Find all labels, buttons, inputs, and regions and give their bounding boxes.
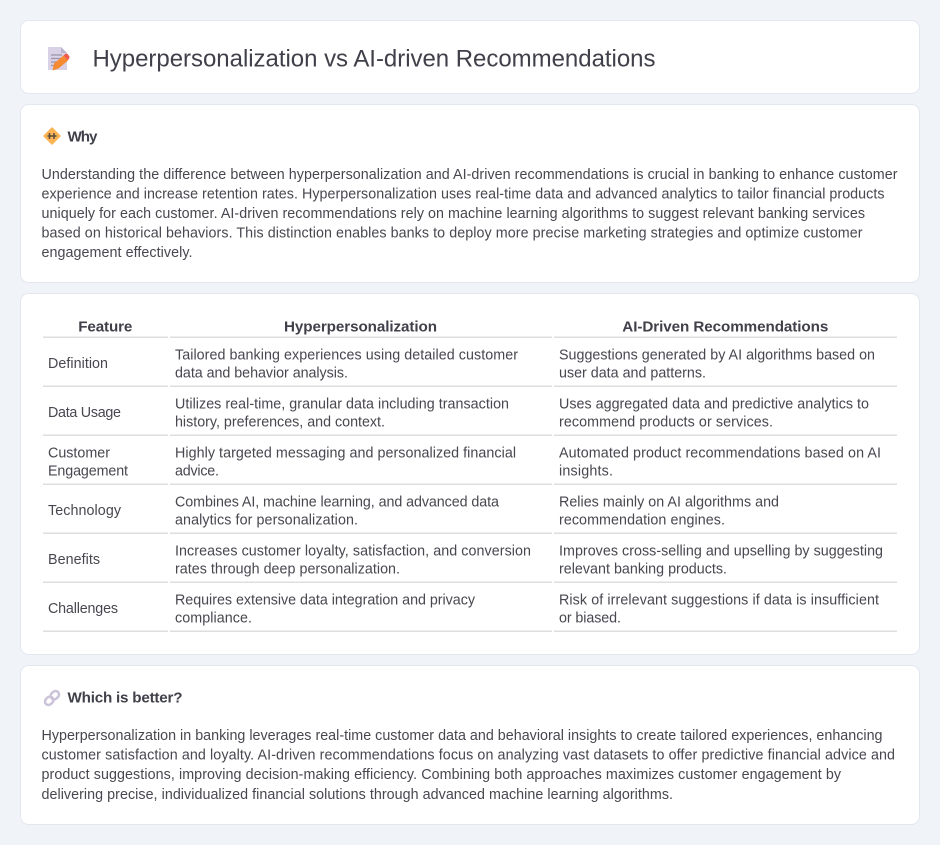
icon: chain link [44,690,60,706]
row: benefits [43,543,897,583]
row: data usage: Uses aggregated data and predictive analytics to [559,396,869,412]
panel: which is better [20,666,920,824]
why paragraph: experience and increase retention rates. Hyperpersonalization uses real-time data and advanced analytics to tailor financial products [42,186,884,202]
row: challenges: Requires extensive data integration and privacy [175,592,476,608]
row: customer engagement: Highly targeted messaging and personalized financial [175,445,516,461]
row: challenges [43,592,897,632]
table header row [43,319,897,338]
row: technology: Relies mainly on AI algorithms and [559,494,779,510]
row: challenges: compliance. [175,610,252,626]
row: customer engagement: Customer [48,445,110,461]
row: customer engagement: insights. [559,463,613,479]
why paragraph: engagement effectively. [42,245,192,261]
row: customer engagement: advice. [175,463,219,479]
row: data usage: Utilizes real-time, granular data including transaction [175,396,509,412]
row: benefits: rates through deep personalization. [175,561,400,577]
row: definition: Tailored banking experiences using detailed customer [175,347,518,363]
panel: comparison table [20,294,920,654]
row: definition: data and behavior analysis. [175,365,348,381]
row: benefits: Benefits [48,552,100,568]
icon: document with pencil [48,47,70,70]
row: technology: recommendation engines. [559,512,725,528]
row: benefits: Improves cross-selling and upselling by suggesting [559,543,883,559]
which is better paragraph: delivering precise, individualized financial solutions through advanced machine learning algorithms. [42,787,673,803]
table header row: Feature [78,319,132,336]
row: definition [43,347,897,387]
row: challenges: or biased. [559,610,621,626]
row: data usage: Data Usage [48,405,121,421]
row: technology: Technology [48,503,122,519]
row: technology: analytics for personalization. [175,512,358,528]
heading: which is better: Which is better? [68,690,182,707]
which is better paragraph: product suggestions, improving decision-making efficiency. Combining both approaches maximizes customer engagement by [42,767,842,783]
title: Hyperpersonalization vs AI-driven Recommendations [92,46,656,72]
row: customer engagement: Engagement [48,463,128,479]
which is better paragraph: Hyperpersonalization in banking leverages real-time customer data and behavioral insights to create tailored experiences, enhancing [42,728,883,744]
row: customer engagement [43,445,897,485]
why paragraph: based on historical behaviors. This distinction enables banks to deploy more precise marketing strategies and optimize customer [42,226,863,242]
row: benefits: Increases customer loyalty, satisfaction, and conversion [175,543,531,559]
row: technology [43,494,897,534]
row: definition: Suggestions generated by AI algorithms based on [559,347,875,363]
why paragraph [42,167,898,261]
row: definition: user data and patterns. [559,365,706,381]
table header row: AI-Driven Recommendations [622,319,828,336]
icon: warning diamond [44,128,60,144]
row: data usage: recommend products or services. [559,414,773,430]
which is better paragraph [42,728,895,803]
row: challenges: Risk of irrelevant suggestions if data is insufficient [559,592,879,608]
row: data usage [43,396,897,436]
row: data usage: history, preferences, and context. [175,414,385,430]
row: technology: Combines AI, machine learning, and advanced data [175,494,499,510]
row: challenges: Challenges [48,601,118,617]
row: customer engagement: Automated product recommendations based on AI [559,445,881,461]
which is better paragraph: customer satisfaction and loyalty. AI-driven recommendations focus on analyzing vast datasets to offer predictive financial advice and [42,748,895,764]
panel: title header [20,20,920,94]
why paragraph: Understanding the difference between hyperpersonalization and AI-driven recommendations is crucial in banking to enhance customer [42,167,898,183]
row: definition: Definition [48,356,108,372]
table header row: Hyperpersonalization [284,319,437,336]
heading: why: Why [68,129,98,146]
why paragraph: uniquely for each customer. AI-driven recommendations rely on machine learning algorithms to suggest relevant banking services [42,206,865,222]
panel: why [20,104,920,282]
row: benefits: relevant banking products. [559,561,727,577]
